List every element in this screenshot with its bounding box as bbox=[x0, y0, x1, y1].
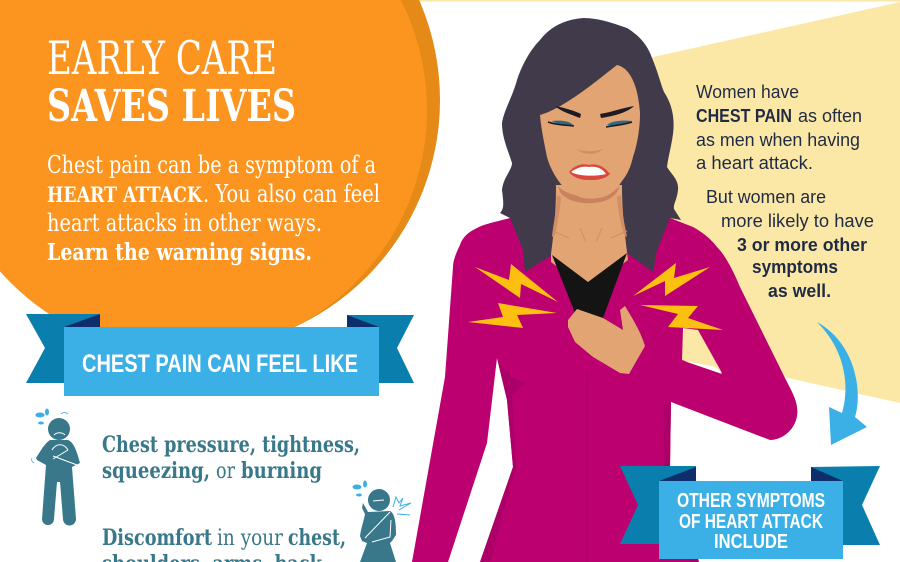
hair bbox=[500, 18, 681, 272]
ribbon: other symptoms: OTHER SYMPTOMS bbox=[677, 490, 825, 512]
white sliver under arm gap bbox=[684, 361, 722, 374]
arrow bbox=[817, 322, 867, 445]
hand bbox=[568, 306, 645, 374]
jacket bbox=[412, 218, 797, 562]
text block: women symptoms: as well. bbox=[768, 281, 831, 301]
heading: early care saves lives bbox=[47, 31, 296, 132]
text block: women symptoms bbox=[696, 82, 874, 301]
icon: person clutching chest bbox=[32, 408, 80, 526]
jacket centre seam bbox=[586, 372, 588, 562]
neck lines bbox=[553, 228, 627, 242]
icon: person with shoulder pain bbox=[352, 480, 411, 562]
text block: discomfort bbox=[102, 525, 346, 562]
text block: intro: heart attacks in other ways. bbox=[47, 209, 322, 237]
text block: women symptoms: as men when having bbox=[696, 130, 860, 150]
text block: women symptoms: CHEST PAIN bbox=[696, 106, 792, 126]
text block: women symptoms: a heart attack. bbox=[696, 153, 813, 173]
panel: yellow backdrop bbox=[640, 2, 900, 403]
text block: women symptoms: symptoms bbox=[752, 257, 838, 277]
text block: chest pressure bbox=[102, 432, 360, 484]
text block: chest pressure: Chest pressure, tightness, bbox=[102, 432, 360, 458]
text block: chest pressure: burning bbox=[241, 458, 322, 484]
jacket shading bbox=[480, 358, 699, 562]
ribbon: other symptoms: INCLUDE bbox=[714, 531, 788, 553]
text block: intro: HEART ATTACK bbox=[47, 182, 203, 207]
eyebrows bbox=[555, 106, 634, 118]
text block: women symptoms: But women are bbox=[706, 187, 826, 207]
face bbox=[540, 65, 640, 199]
text block: chest pressure: or bbox=[216, 459, 235, 484]
neck side shading bbox=[552, 195, 627, 237]
heading: early care saves lives: SAVES LIVES bbox=[47, 81, 296, 132]
chin shadow bbox=[558, 186, 620, 203]
black shirt bbox=[552, 253, 627, 318]
text block: discomfort: in your bbox=[217, 526, 283, 551]
panel: orange circle bbox=[0, 0, 440, 354]
eyes bbox=[548, 121, 632, 127]
neck bbox=[551, 185, 628, 290]
gap under arm bbox=[682, 328, 722, 373]
mouth bbox=[569, 164, 610, 180]
woman illustration bbox=[412, 18, 797, 562]
ribbon: chest pain can feel like: CHEST PAIN CAN FEEL LIKE bbox=[82, 350, 358, 378]
ribbon: chest pain can feel like bbox=[26, 314, 414, 396]
text block: discomfort: Discomfort bbox=[102, 525, 213, 551]
ribbon: other symptoms: OF HEART ATTACK bbox=[679, 511, 823, 533]
text block: chest pressure: squeezing, bbox=[102, 458, 210, 484]
text block: women symptoms: more likely to have bbox=[721, 211, 874, 231]
text block: intro bbox=[47, 151, 380, 266]
heading: early care saves lives: EARLY CARE bbox=[47, 31, 277, 85]
text block: intro: . You also can feel bbox=[203, 180, 380, 208]
text block: intro: Chest pain can be a symptom of a bbox=[47, 151, 376, 179]
text block: women symptoms: 3 or more other bbox=[737, 235, 867, 255]
ribbon: other symptoms bbox=[620, 466, 880, 559]
text block: discomfort: chest, bbox=[288, 525, 346, 551]
text block: women symptoms: as often bbox=[798, 106, 862, 126]
text block: women symptoms: Women have bbox=[696, 82, 799, 102]
pain bolts bbox=[468, 263, 723, 330]
text block: intro: Learn the warning signs. bbox=[47, 239, 312, 266]
nose bbox=[577, 149, 602, 154]
